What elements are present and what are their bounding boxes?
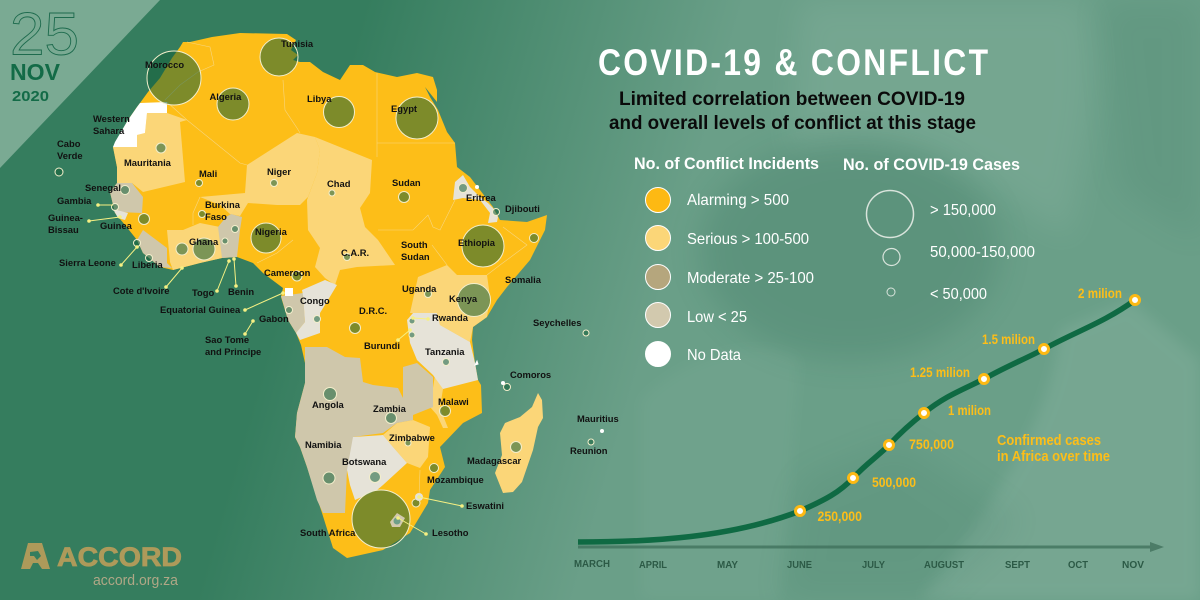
country labels: Sahara [93, 125, 125, 136]
data labels [818, 286, 1122, 524]
country labels: Cote d'Ivoire [113, 285, 169, 296]
islands and small countries [390, 185, 604, 527]
date year: 2020 [12, 88, 49, 105]
country labels: Sudan [392, 177, 421, 188]
data labels: 750,000 [909, 437, 954, 452]
country labels: Burundi [364, 340, 400, 351]
legend: conflict incidents: Low < 25 [687, 309, 747, 326]
country labels: Sudan [401, 251, 430, 262]
country labels: Lesotho [432, 527, 469, 538]
legend: COVID-19 cases [843, 156, 1035, 303]
country labels: Eritrea [466, 192, 496, 203]
country labels: Namibia [305, 439, 342, 450]
country labels: Rwanda [432, 312, 469, 323]
subtitle [609, 89, 976, 134]
country labels: Cabo [57, 138, 81, 149]
cases curve [578, 300, 1135, 542]
country labels: Mauritania [124, 157, 172, 168]
month axis labels: JUNE [787, 559, 812, 571]
data labels: 500,000 [872, 475, 916, 490]
month axis labels [574, 558, 1144, 571]
legend heading: cases: No. of COVID-19 Cases [843, 156, 1020, 174]
legend: conflict incidents [634, 155, 819, 366]
logo wordmark: ACCORD [57, 542, 182, 572]
country labels: Comoros [510, 369, 551, 380]
country labels: Mozambique [427, 474, 484, 485]
time axis arrow [578, 542, 1164, 552]
continent base: alarming countries [110, 33, 547, 558]
country labels: South [401, 239, 428, 250]
country labels: Ghana [189, 236, 219, 247]
country labels: Togo [192, 287, 214, 298]
country labels: Senegal [85, 182, 121, 193]
country labels: Botswana [342, 456, 387, 467]
legend: COVID-19 cases: 50,000-150,000 [930, 244, 1035, 261]
country labels: Uganda [402, 283, 437, 294]
country labels: Eswatini [466, 500, 504, 511]
date month: NOV [10, 59, 61, 85]
country labels: Liberia [132, 259, 164, 270]
country labels: Ethiopia [458, 237, 496, 248]
country labels: Somalia [505, 274, 542, 285]
country labels: Reunion [570, 445, 608, 456]
title: COVID-19 & CONFLICT [598, 43, 988, 84]
month axis labels: APRIL [639, 559, 668, 571]
country labels: Equatorial Guinea [160, 304, 241, 315]
country labels: Mauritius [577, 413, 619, 424]
country labels: Djibouti [505, 203, 540, 214]
month axis labels: SEPT [1005, 559, 1031, 571]
chart caption [997, 433, 1110, 465]
legend: conflict incidents: Serious > 100-500 [687, 231, 809, 248]
country labels: Bissau [48, 224, 79, 235]
country labels: D.R.C. [359, 305, 387, 316]
country labels: Libya [307, 93, 332, 104]
country labels: Egypt [391, 103, 417, 114]
low countries [113, 175, 498, 500]
data labels: 250,000 [818, 509, 862, 524]
data labels: 1.25 milion [910, 365, 970, 380]
legend: COVID-19 cases: < 50,000 [930, 286, 987, 303]
logo icon: A with Africa [21, 543, 50, 569]
subtitle: Limited correlation between COVID-19 [619, 89, 965, 110]
chart caption: Confirmed cases [997, 433, 1101, 449]
country borders [165, 42, 527, 497]
country labels: and Principe [205, 346, 261, 357]
month axis labels: OCT [1068, 559, 1089, 571]
background photo: medical worker in protective suit [640, 0, 1200, 600]
country labels: Malawi [438, 396, 469, 407]
legend: conflict incidents: No Data [687, 347, 741, 364]
country labels: South Africa [300, 527, 356, 538]
month axis labels: JULY [862, 559, 885, 571]
month axis labels: NOV [1122, 559, 1144, 571]
country labels: Angola [312, 399, 345, 410]
date corner panel [0, 0, 160, 168]
country labels: Western [93, 113, 130, 124]
map of Africa [48, 33, 619, 558]
country labels [48, 38, 619, 538]
country labels: Seychelles [533, 317, 581, 328]
country labels: Kenya [449, 293, 478, 304]
country labels: Chad [327, 178, 351, 189]
legend: conflict incidents: Moderate > 25-100 [687, 270, 814, 287]
legend: conflict incidents: Alarming > 500 [687, 192, 789, 209]
country labels: Guinea- [48, 212, 83, 223]
country labels: Gambia [57, 195, 92, 206]
country labels: Zambia [373, 403, 407, 414]
ACCORD logo [21, 542, 182, 589]
data labels: 2 milion [1078, 286, 1122, 301]
country labels: Tanzania [425, 346, 465, 357]
country labels: Zimbabwe [389, 432, 435, 443]
data points [796, 296, 1140, 516]
month axis labels: MAY [717, 559, 738, 571]
moderate countries [110, 183, 433, 513]
country labels: Sierra Leone [59, 257, 116, 268]
country labels: Mali [199, 168, 217, 179]
country labels: Faso [205, 211, 227, 222]
country labels: Madagascar [467, 455, 522, 466]
country labels: Niger [267, 166, 291, 177]
country labels: Tunisia [281, 38, 314, 49]
chart caption: in Africa over time [997, 449, 1110, 465]
date day: 25 [10, 0, 79, 68]
data labels: 1.5 milion [982, 332, 1035, 347]
country labels: C.A.R. [341, 247, 369, 258]
month axis labels: MARCH [574, 558, 610, 570]
serious countries [113, 113, 543, 493]
country labels: Nigeria [255, 226, 288, 237]
subtitle: and overall levels of conflict at this stage [609, 113, 976, 134]
country labels: Morocco [145, 59, 184, 70]
country labels: Congo [300, 295, 330, 306]
country labels: Sao Tome [205, 334, 249, 345]
country labels: Guinea [100, 220, 133, 231]
country labels: Algeria [210, 91, 242, 102]
leader lines [87, 203, 464, 536]
country labels: Verde [57, 150, 83, 161]
country labels: Burkina [205, 199, 241, 210]
legend: COVID-19 cases: > 150,000 [930, 202, 996, 219]
no data countries [113, 102, 293, 296]
month axis labels: AUGUST [924, 559, 965, 571]
country labels: Cameroon [264, 267, 311, 278]
COVID case bubbles [55, 38, 594, 548]
line chart: confirmed cases over time [574, 286, 1164, 571]
country labels: Gabon [259, 313, 289, 324]
country labels: Benin [228, 286, 254, 297]
data labels: 1 milion [948, 403, 991, 418]
logo url: accord.org.za [93, 572, 179, 589]
legend heading: conflict: No. of Conflict Incidents [634, 155, 819, 173]
